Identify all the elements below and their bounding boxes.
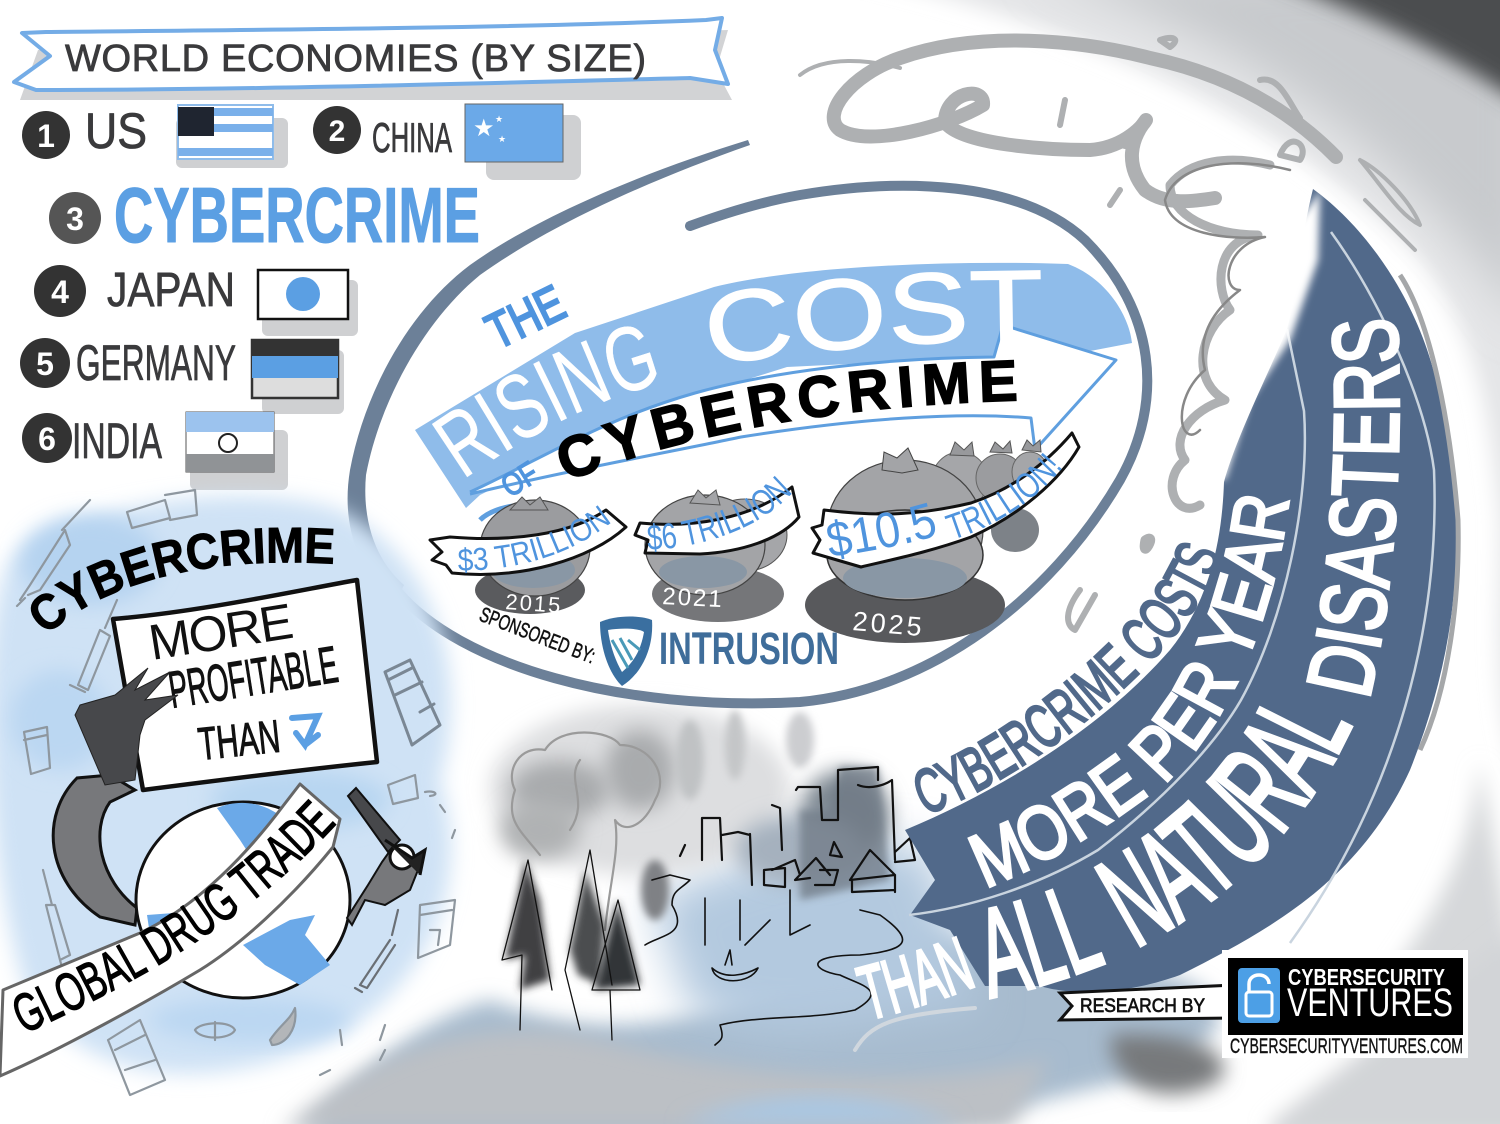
flag: japan <box>258 270 358 336</box>
banner heading <box>14 18 728 90</box>
money bag: 2021 <box>633 476 800 622</box>
rank 1 us: 1 <box>37 118 55 154</box>
flag: india <box>186 412 288 490</box>
heading: cybercrime: CYBERCRIME <box>30 527 334 630</box>
background: storm wash top right <box>840 0 1500 1124</box>
rank 3 cybercrime: CYBERCRIME <box>114 171 480 259</box>
rank 5 germany <box>20 335 344 414</box>
panel: world economies <box>14 18 732 490</box>
rank 2 china: 2 <box>329 115 345 148</box>
ribbon: research by <box>1060 985 1235 1020</box>
flag: us <box>176 105 288 168</box>
rank 1 us: US <box>85 103 147 159</box>
rank 4 japan <box>34 264 358 336</box>
rank 5 germany: 5 <box>36 346 54 382</box>
logo wordmark bottom: VENTURES <box>1287 981 1453 1025</box>
rank 3 cybercrime <box>49 171 480 259</box>
money bag: 2015: $3 TRILLION <box>458 505 610 574</box>
wave text: all: ALL <box>988 888 1106 1000</box>
banner shadow <box>20 30 732 100</box>
wave: light contour lines <box>909 329 1305 915</box>
arrow outline <box>470 325 1116 494</box>
wave: dark blue body <box>854 189 1461 1019</box>
heading: cost: COST <box>710 270 1041 362</box>
panel: cybercrime vs drug trade <box>0 488 460 1096</box>
icon: padlock <box>1238 968 1280 1023</box>
dark pine trees <box>502 850 640 1040</box>
money bag: 2015 <box>428 496 628 618</box>
icons: drug sketches <box>17 490 455 1095</box>
ribbon: 10.5 trillion <box>812 433 1079 567</box>
heading: rising: RISING <box>432 326 657 478</box>
banner heading: WORLD ECONOMIES (BY SIZE) <box>65 38 647 80</box>
flag: china: ★ <box>495 114 503 124</box>
illustration: burning forest and smoke <box>502 732 660 1040</box>
rank 1 us <box>22 103 288 168</box>
ribbon: research by: RESEARCH BY <box>1080 996 1205 1017</box>
rank 2 china <box>313 104 581 180</box>
blue wash blob <box>0 496 451 1074</box>
bandit figure <box>347 788 425 925</box>
small boat <box>712 950 758 981</box>
wave: foam and spray strokes <box>800 38 1420 630</box>
rank 3 cybercrime: 3 <box>66 201 84 237</box>
ribbon: 3 trillion <box>430 510 626 574</box>
year: 2015: 2015 <box>505 589 563 618</box>
rank 6 india: INDIA <box>72 413 162 469</box>
rank 5 germany: GERMANY <box>76 335 236 391</box>
scroll: more profitable than <box>113 580 377 790</box>
year: 2021: 2021 <box>662 583 724 613</box>
scroll text: more: MORE <box>145 593 297 671</box>
ribbon: 6 trillion <box>635 487 799 554</box>
wave text: disasters: DISASTERS <box>1306 320 1400 696</box>
flag: germany <box>252 340 344 414</box>
sponsored by label: SPONSORED BY: <box>476 603 598 668</box>
heading: cybercrime: CYBERCRIME <box>558 360 1017 477</box>
sponsor <box>476 603 839 686</box>
ribbon amount: $10.5 <box>827 502 936 560</box>
dark hand holding scroll <box>53 668 178 925</box>
heading: of: OF <box>495 454 544 504</box>
logo wordmark top: CYBERSECURITY <box>1288 964 1445 990</box>
illustration: drowned city skyline <box>645 767 975 1050</box>
intrusion wordmark: INTRUSION <box>659 623 839 674</box>
flag: china: ★ <box>473 115 495 142</box>
credit: research by cybersecurity ventures <box>1060 950 1468 1058</box>
wave text: natural: NATURAL <box>1094 706 1354 948</box>
money bag: 2025 <box>805 431 1080 643</box>
scroll text: profitable: PROFITABLE <box>165 636 342 720</box>
heading: the: THE <box>477 274 574 360</box>
blue brush strip <box>415 263 1132 508</box>
smoke cloud outline <box>512 732 660 930</box>
logo card <box>1222 950 1468 1058</box>
wave text: than: THAN <box>854 936 976 1019</box>
flag: china <box>465 104 581 180</box>
icon: blue down arrow <box>292 716 318 745</box>
ribbon: global drug trade: GLOBAL DRUG TRADE <box>14 798 337 1030</box>
globe <box>136 802 350 998</box>
ribbon unit: TRILLION! <box>944 452 1062 538</box>
background: sea and smoke wash at bottom <box>280 705 1224 1124</box>
scroll text: than: THAN <box>196 710 283 770</box>
icon: intrusion shield <box>600 616 652 686</box>
money bag: 2021: $6 TRILLION <box>648 476 792 552</box>
year: 2025: 2025 <box>851 606 926 642</box>
title oval <box>348 140 1152 708</box>
rank 4 japan: 4 <box>51 274 69 310</box>
rank 2 china: CHINA <box>372 114 452 161</box>
rank 6 india <box>22 412 288 490</box>
wave text: more per year: MORE PER YEAR <box>967 496 1290 888</box>
rank 4 japan: JAPAN <box>107 264 235 317</box>
wave text: cybercrime costs: CYBERCRIME COSTS <box>914 542 1216 812</box>
flag: china: ★ <box>498 134 506 144</box>
rank 6 india: 6 <box>38 421 56 457</box>
